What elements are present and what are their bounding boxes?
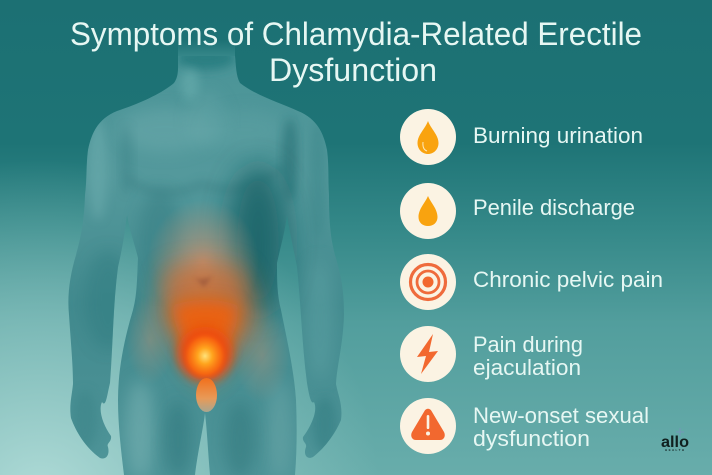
icon: flame drop (400, 109, 456, 165)
symptom: burning urination (400, 109, 643, 165)
symptom: pain during ejaculation (400, 326, 583, 382)
navel (192, 276, 212, 287)
icon: warning triangle (400, 398, 456, 454)
logo: allo health: allo (661, 434, 689, 451)
symptom: penile discharge: Penile discharge (473, 195, 635, 220)
pectoral crease (128, 166, 284, 192)
symptom: new-onset sexual dysfunction (400, 398, 649, 454)
logo: allo health (661, 428, 689, 452)
symptom: new-onset sexual dysfunction: New-onset sexual (473, 403, 649, 428)
symptom: chronic pelvic pain (400, 254, 663, 310)
logo: allo health: HEALTH (665, 448, 684, 452)
symptom: new-onset sexual dysfunction: dysfunction (473, 426, 590, 451)
hip tint (130, 304, 169, 377)
title (70, 16, 642, 88)
illustration: human torso with pelvic glow (60, 40, 360, 475)
head and neck fading into background (178, 40, 235, 58)
symptom: penile discharge (400, 183, 635, 239)
icon: target (400, 254, 456, 310)
title: Dysfunction (269, 52, 437, 88)
body figure (68, 56, 344, 475)
pelvic glow centre (182, 331, 228, 381)
icon: drop (400, 183, 456, 239)
title: Symptoms of Chlamydia-Related Erectile (70, 16, 642, 52)
lower form (196, 378, 217, 412)
symptom: chronic pelvic pain: Chronic pelvic pain (473, 267, 663, 292)
symptom: pain during ejaculation: Pain during (473, 332, 583, 357)
symptom: pain during ejaculation: ejaculation (473, 355, 581, 380)
symptom: burning urination: Burning urination (473, 123, 643, 148)
icon: lightning bolt (400, 326, 456, 382)
